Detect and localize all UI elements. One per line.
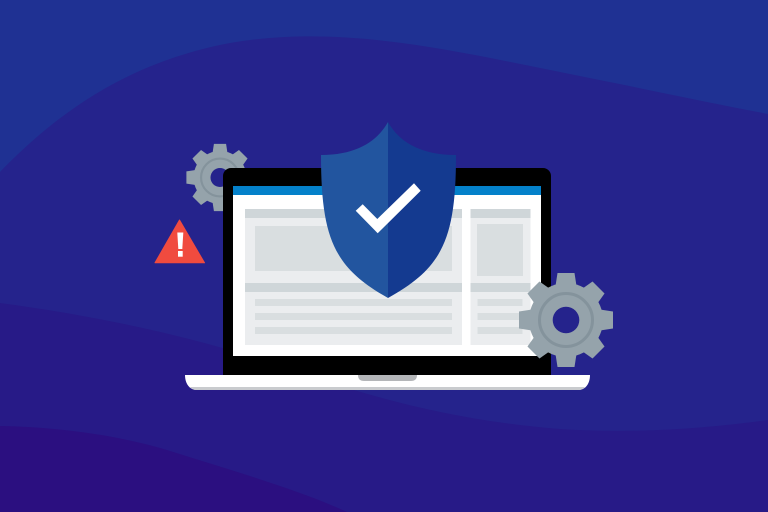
icon: large gear [519, 273, 613, 367]
laptop base [185, 375, 590, 390]
icon: warning triangle [155, 220, 204, 263]
laptop lid [223, 168, 551, 376]
browser bar [233, 186, 541, 195]
shield right half [388, 122, 456, 298]
main content panel [245, 209, 462, 345]
screen [233, 195, 541, 356]
laptop [185, 168, 590, 390]
exclamation mark [177, 232, 183, 249]
icon: shield with check [321, 122, 456, 298]
shield left half [321, 122, 388, 298]
icon: small gear [186, 144, 254, 211]
sidebar panel [470, 209, 530, 345]
trackpad notch [358, 375, 417, 381]
check mark [356, 183, 421, 233]
